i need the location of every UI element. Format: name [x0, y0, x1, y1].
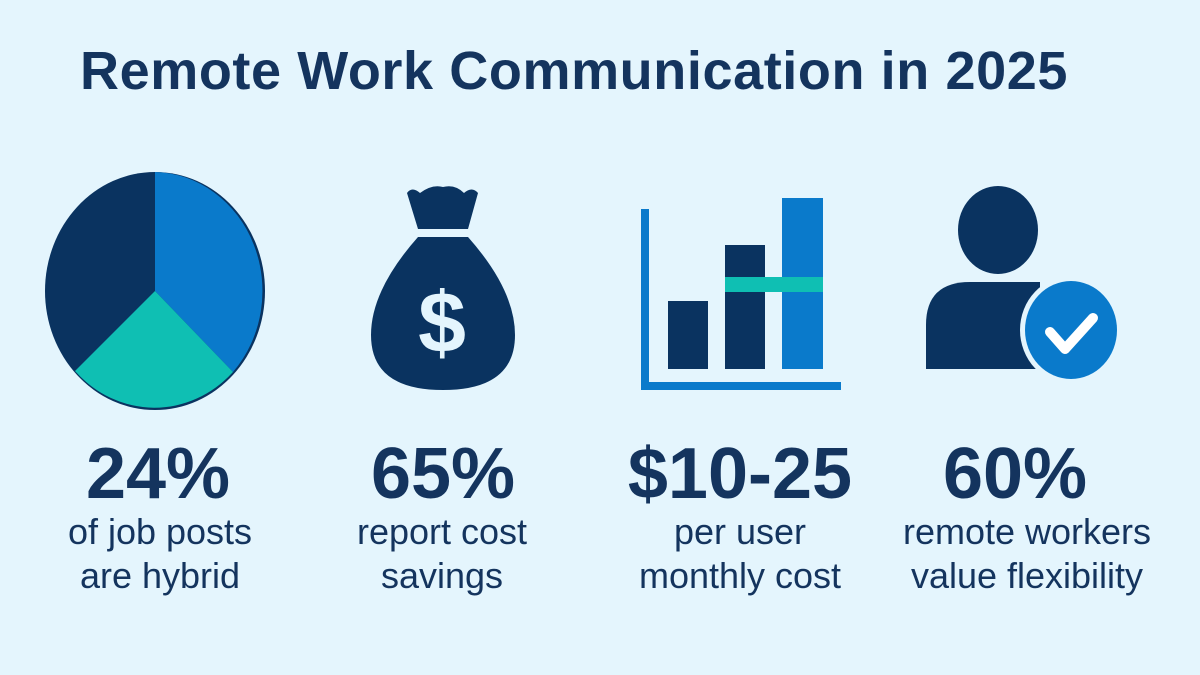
- icon: person with check: [926, 186, 1122, 384]
- icon: bar chart: [641, 198, 841, 390]
- icon: pie chart: [45, 172, 265, 410]
- text: cost savings: [357, 511, 527, 596]
- text: flexibility: value flexibility: [911, 555, 1143, 596]
- text: hybrid: are hybrid: [80, 555, 240, 596]
- text: cost savings: report cost: [357, 511, 527, 552]
- stat: hybrid: 24%: [86, 434, 230, 514]
- stat: cost savings: 65%: [371, 434, 515, 514]
- text: flexibility: remote workers: [903, 511, 1151, 552]
- icon: money bag: $: [418, 275, 466, 371]
- text: monthly cost: [639, 511, 841, 596]
- title: Remote Work Communication in 2025: [80, 41, 1068, 101]
- icon: money bag: [371, 186, 515, 390]
- stat: monthly cost: $10-25: [628, 434, 852, 514]
- stat: flexibility: 60%: [943, 434, 1087, 514]
- text: monthly cost: monthly cost: [639, 555, 841, 596]
- text: flexibility: [903, 511, 1151, 596]
- text: cost savings: savings: [381, 555, 503, 596]
- text: monthly cost: per user: [674, 511, 806, 552]
- text: hybrid: [68, 511, 252, 596]
- text: hybrid: of job posts: [68, 511, 252, 552]
